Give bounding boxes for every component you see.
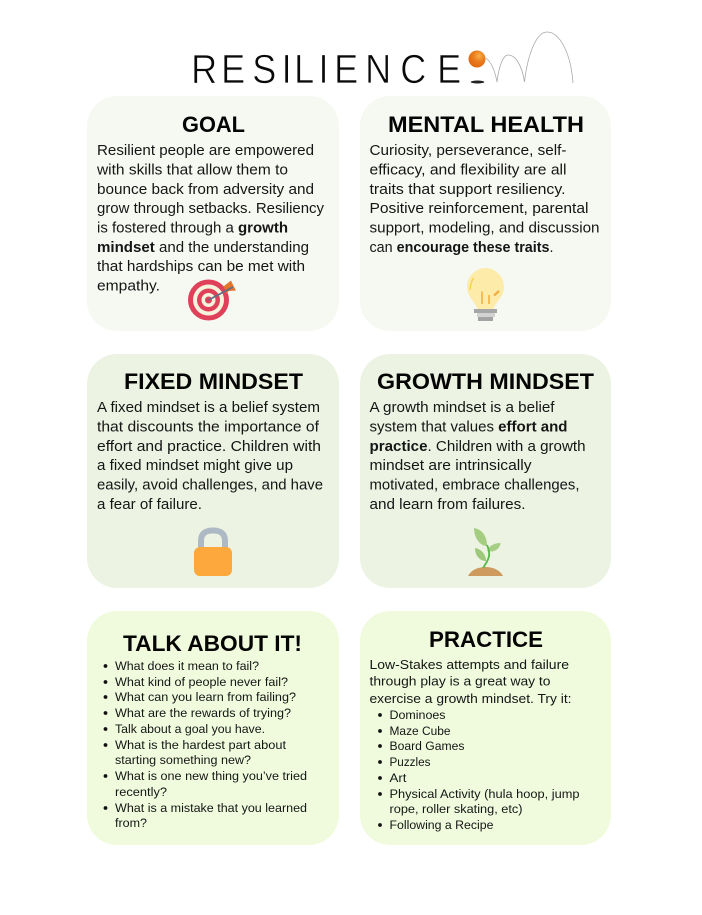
- list: discussion questions: What is a mistake that you learned: [115, 801, 307, 815]
- text block: practice intro: Low-Stakes attempts and failure: [370, 657, 569, 672]
- heading: fixed mindset: FIXED MINDSET: [124, 369, 303, 394]
- text block: goal: with skills that allow them to: [96, 162, 288, 178]
- text block: goal: mindset and the understanding: [97, 240, 309, 256]
- text block: practice intro: [370, 657, 572, 706]
- text block: goal: that hardships can be met with: [97, 259, 305, 275]
- list: practice activities: Art: [390, 771, 407, 785]
- text block: growth mindset: practice. Children with a growth: [370, 439, 586, 455]
- list: practice activities: Following a Recipe: [390, 818, 494, 832]
- text block: growth mindset: mindset are intrinsically: [370, 458, 532, 474]
- text block: goal: empathy.: [97, 278, 160, 294]
- list: practice activities: Puzzles: [390, 755, 430, 769]
- text block: fixed mindset: effort and practice. Children with: [97, 439, 321, 455]
- list: discussion questions: What does it mean to fail?: [115, 659, 259, 673]
- icon: seedling: [468, 528, 503, 576]
- text block: growth mindset: system that values effort and: [370, 420, 568, 436]
- list: discussion questions: What is the hardest part about: [115, 738, 287, 752]
- heading: practice: PRACTICE: [429, 627, 543, 652]
- text block: mental health: can encourage these traits.: [370, 240, 554, 256]
- icon: padlock: [194, 530, 232, 576]
- list: discussion questions: What can you learn from failing?: [115, 690, 296, 704]
- heading: growth mindset: GROWTH MINDSET: [377, 369, 594, 394]
- text block: growth mindset: and learn from failures.: [370, 497, 526, 513]
- text block: practice intro: exercise a growth mindset. Try it:: [370, 691, 572, 706]
- list: discussion questions: What are the rewards of trying?: [115, 706, 291, 720]
- text block: fixed mindset: that discounts the importance of: [97, 420, 320, 436]
- list: practice activities: [378, 708, 580, 832]
- text block: fixed mindset: [97, 400, 323, 513]
- text block: goal: [96, 143, 325, 294]
- text block: fixed mindset: a fear of failure.: [97, 497, 202, 513]
- text block: goal: bounce back from adversity and: [97, 182, 314, 198]
- heading: mental health: MENTAL HEALTH: [388, 112, 584, 137]
- list: discussion questions: What kind of people never fail?: [115, 675, 288, 689]
- list: practice activities: Physical Activity (hula hoop, jump: [390, 787, 580, 801]
- list: discussion questions: Talk about a goal you have.: [115, 722, 265, 736]
- text block: mental health: efficacy, and flexibility are all: [370, 162, 566, 178]
- icon: bouncing ball: [468, 32, 573, 84]
- text block: goal: Resilient people are empowered: [97, 143, 314, 159]
- text block: mental health: support, modeling, and discussion: [370, 220, 600, 236]
- list: discussion questions: [104, 659, 307, 830]
- text block: mental health: [370, 143, 600, 256]
- text block: goal: grow through setbacks. Resiliency: [97, 201, 325, 217]
- title: [191, 32, 573, 93]
- title: RESILIENCE: [191, 47, 461, 93]
- list: practice activities: Dominoes: [390, 708, 446, 722]
- heading: goal: GOAL: [182, 112, 245, 137]
- panel: growth mindset: [360, 354, 611, 588]
- icon: target: [188, 280, 236, 320]
- panel: fixed mindset: [87, 354, 339, 588]
- text block: goal: is fostered through a growth: [97, 220, 288, 236]
- text block: mental health: traits that support resiliency.: [370, 182, 566, 198]
- panel: practice: [360, 611, 611, 845]
- text block: fixed mindset: easily, avoid challenges, and have: [97, 478, 323, 494]
- panel: talk about it: [87, 611, 339, 845]
- panel: mental health: [360, 96, 611, 331]
- text block: mental health: Curiosity, perseverance, self-: [370, 143, 567, 159]
- icon: light bulb: [467, 268, 504, 321]
- list: practice activities: Maze Cube: [390, 724, 451, 738]
- text block: fixed mindset: A fixed mindset is a belief system: [97, 400, 320, 416]
- text block: growth mindset: A growth mindset is a belief: [370, 400, 555, 416]
- list: discussion questions: recently?: [115, 785, 167, 799]
- list: practice activities: Board Games: [390, 739, 464, 753]
- text block: mental health: Positive reinforcement, parental: [370, 201, 588, 217]
- heading: talk about it: TALK ABOUT IT!: [123, 631, 302, 656]
- panel: goal: [87, 96, 339, 331]
- text block: growth mindset: [370, 400, 586, 513]
- text block: fixed mindset: a fixed mindset might give up: [97, 458, 293, 474]
- text block: practice intro: through play is a great way to: [370, 674, 550, 688]
- list: discussion questions: from?: [115, 816, 147, 830]
- list: practice activities: rope, roller skating, etc): [390, 802, 522, 816]
- list: discussion questions: starting something new?: [115, 753, 251, 767]
- list: discussion questions: What is one new thing you’ve tried: [115, 769, 307, 783]
- text block: growth mindset: motivated, embrace challenges,: [370, 478, 580, 494]
